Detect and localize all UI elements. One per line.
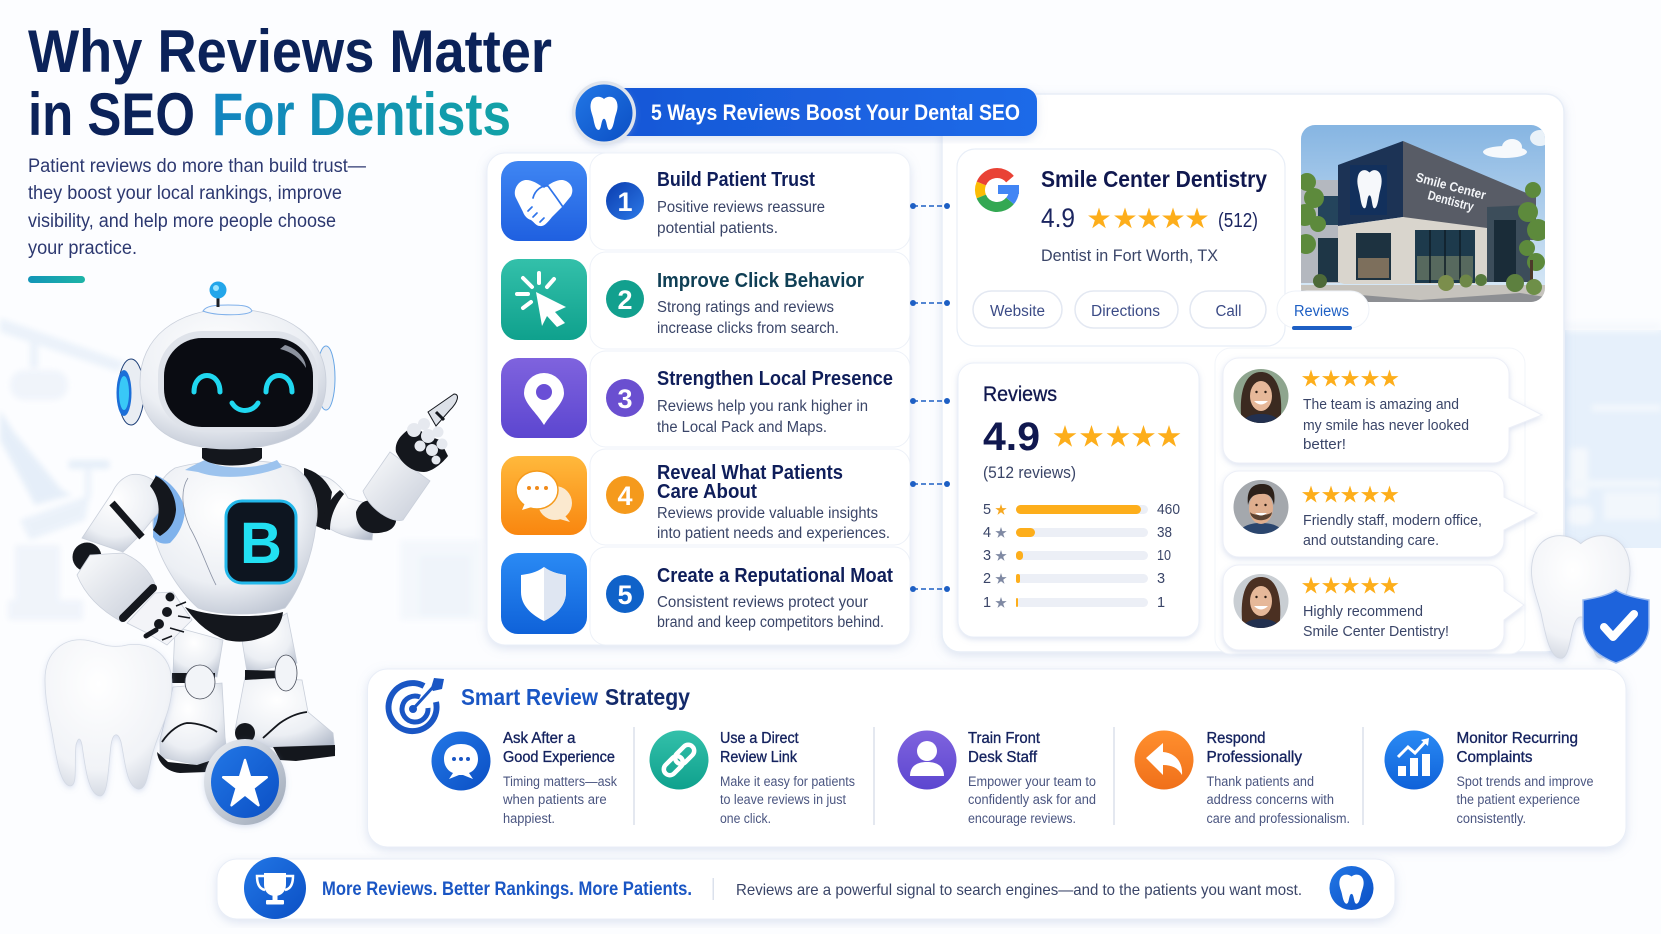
building photo: Smile Center — [1414, 169, 1488, 203]
icon: large tooth — [45, 640, 172, 796]
item: respond professionally — [1134, 730, 1350, 826]
title: Why Reviews Matter — [28, 18, 552, 85]
row 2: improve click behavior: Strong ratings and reviews — [657, 299, 834, 316]
robot: legs — [157, 613, 335, 773]
item: train front desk staff: Desk Staff — [968, 749, 1038, 766]
rating histogram: 1 — [983, 595, 991, 611]
robot: pointing arm — [304, 394, 457, 540]
row 3: strengthen local presence: Reviews help you rank higher in — [657, 398, 868, 415]
item: monitor recurring complaints: consistently. — [1456, 811, 1526, 826]
robot: head — [116, 305, 335, 449]
panel: smart review strategy: Strategy — [605, 684, 690, 710]
row 3: strengthen local presence: Strengthen Local Presence — [657, 368, 893, 390]
google business card: 4.9 — [1041, 203, 1075, 233]
intro paragraph: they boost your local rankings, improve — [28, 183, 342, 204]
rating histogram: 460 — [1157, 502, 1180, 518]
banner: 5 ways: 5 Ways Reviews Boost Your Dental SEO — [651, 100, 1020, 125]
accent bar — [28, 276, 85, 283]
avatar 3 — [1233, 573, 1289, 629]
testimonial 2 — [1223, 471, 1537, 557]
rating histogram: 3 — [1157, 571, 1165, 587]
item: ask after a good experience — [432, 730, 617, 826]
item: monitor recurring complaints: Complaints — [1456, 749, 1533, 766]
avatar 1 — [1233, 368, 1289, 424]
rating histogram: 10 — [1157, 548, 1171, 564]
icon: tooth badge — [1330, 866, 1374, 910]
icon: target — [389, 678, 444, 731]
item: respond professionally: Professionally — [1206, 749, 1302, 766]
row 1: build patient trust: potential patients. — [657, 220, 778, 237]
rating stars — [1088, 208, 1208, 228]
item: train front desk staff: confidently ask for and — [968, 792, 1096, 807]
row 1: build patient trust: 1 — [617, 187, 633, 217]
panel: reviews summary: (512 reviews) — [983, 463, 1076, 482]
building photo — [1294, 125, 1550, 302]
action buttons: Reviews — [1294, 303, 1349, 320]
rating histogram: 2 — [983, 571, 991, 587]
row 4: reveal what patients care about: Reveal What Patients — [657, 462, 843, 484]
row 4: reveal what patients care about — [501, 449, 910, 545]
robot: bent arm — [72, 474, 192, 645]
google business card — [957, 149, 1369, 346]
rating histogram: 3 — [983, 548, 991, 564]
avatar 2 — [1233, 479, 1289, 535]
google business card: Smile Center Dentistry — [1041, 166, 1267, 192]
row 1: build patient trust — [501, 153, 910, 250]
item: train front desk staff — [898, 730, 1096, 826]
stars 3 — [1302, 576, 1399, 594]
icon: tooth with shield — [1531, 536, 1649, 663]
robot: chest badge: B — [240, 511, 282, 576]
item: respond professionally: Thank patients and — [1206, 774, 1314, 789]
stars 2 — [1302, 486, 1399, 503]
action buttons: Website — [990, 303, 1045, 320]
row 3: strengthen local presence — [501, 351, 910, 447]
rating histogram: 4 — [983, 525, 991, 541]
item: train front desk staff: encourage reviews. — [968, 811, 1076, 826]
row 1: build patient trust: Positive reviews reassure — [657, 199, 825, 216]
panel: smart review strategy — [368, 669, 1626, 847]
intro paragraph: Patient reviews do more than build trust— — [28, 156, 366, 177]
panel: bottom banner — [217, 857, 1395, 919]
item: respond professionally: Respond — [1206, 730, 1266, 747]
testimonial 3: Smile Center Dentistry! — [1303, 623, 1449, 640]
item: use a direct review link: Make it easy for patients — [720, 774, 855, 789]
icon: trophy — [244, 857, 306, 919]
item: train front desk staff: Train Front — [968, 730, 1041, 747]
row 2: improve click behavior: 2 — [617, 285, 633, 315]
connectors — [910, 203, 950, 592]
summary stars — [1054, 425, 1180, 447]
row 1: build patient trust: Build Patient Trust — [657, 169, 815, 191]
item: respond professionally: care and professionalism. — [1206, 811, 1350, 826]
google business card: Dentist in Fort Worth, TX — [1041, 247, 1218, 265]
testimonial 1: The team is amazing and — [1303, 396, 1459, 413]
panel: reviews summary — [958, 363, 1199, 637]
row 4: reveal what patients care about: into patient needs and experiences. — [657, 525, 890, 542]
google business card: (512) — [1218, 210, 1258, 232]
item: use a direct review link: one click. — [720, 811, 771, 826]
action buttons — [973, 291, 1369, 330]
testimonial 3 — [1223, 565, 1524, 650]
robot: antenna — [210, 282, 226, 307]
row 5: create a reputational moat: Consistent reviews protect your — [657, 594, 868, 611]
panel: reviews summary: Reviews — [983, 383, 1057, 406]
row 5: create a reputational moat: Create a Reputational Moat — [657, 565, 893, 587]
testimonial 1: better! — [1303, 436, 1346, 453]
title: in SEO — [28, 81, 195, 148]
row 2: improve click behavior: increase clicks from search. — [657, 320, 839, 337]
building photo: Dentistry — [1426, 187, 1476, 214]
row 4: reveal what patients care about: Reviews provide valuable insights — [657, 505, 878, 522]
row 3: strengthen local presence: 3 — [617, 384, 633, 414]
stars 1 — [1302, 370, 1399, 387]
intro paragraph: visibility, and help more people choose — [28, 211, 336, 232]
robot: torso — [153, 460, 316, 614]
item: monitor recurring complaints: Monitor Recurring — [1456, 730, 1578, 747]
item: use a direct review link: Review Link — [720, 749, 797, 766]
testimonial 3: Highly recommend — [1303, 603, 1423, 620]
testimonial 1: my smile has never looked — [1303, 417, 1469, 434]
icon: google g — [980, 173, 1019, 207]
action buttons: Call — [1216, 303, 1242, 320]
row 2: improve click behavior: Improve Click Behavior — [657, 270, 864, 292]
panel: testimonial backing — [1215, 348, 1525, 654]
title: For Dentists — [212, 81, 511, 148]
item: ask after a good experience: Timing matters—ask — [503, 774, 617, 789]
item: ask after a good experience: Good Experience — [503, 749, 615, 766]
item: ask after a good experience: happiest. — [503, 811, 555, 826]
item: use a direct review link — [650, 730, 855, 826]
item: monitor recurring complaints — [1384, 730, 1594, 826]
panel: reviews summary: 4.9 — [983, 415, 1040, 459]
intro paragraph — [28, 156, 366, 259]
item: respond professionally: address concerns with — [1206, 792, 1334, 807]
item: monitor recurring complaints: Spot trends and improve — [1456, 774, 1594, 789]
item: use a direct review link: to leave reviews in just — [720, 792, 846, 807]
title — [28, 18, 552, 148]
testimonial 2: and outstanding care. — [1303, 532, 1439, 549]
row 4: reveal what patients care about: Care About — [657, 481, 757, 503]
item: ask after a good experience: when patients are — [502, 792, 607, 807]
intro paragraph: your practice. — [28, 238, 137, 259]
robot mascot — [72, 282, 457, 773]
testimonial 2: Friendly staff, modern office, — [1303, 512, 1482, 529]
action buttons: Directions — [1091, 303, 1160, 320]
icon: star coin — [204, 739, 286, 825]
testimonial 1 — [1223, 358, 1542, 463]
banner: 5 ways — [572, 81, 1037, 145]
panel: bottom banner: More Reviews. Better Rankings. More Patients. — [322, 879, 692, 900]
item: train front desk staff: Empower your team to — [968, 774, 1096, 789]
item: monitor recurring complaints: the patient experience — [1456, 792, 1580, 807]
panel: five ways list — [487, 153, 910, 645]
item: ask after a good experience: Ask After a — [503, 730, 576, 747]
row 2: improve click behavior — [501, 252, 910, 349]
row 5: create a reputational moat: brand and keep competitors behind. — [657, 614, 884, 631]
item: use a direct review link: Use a Direct — [720, 730, 799, 747]
panel: smart review strategy: Smart Review — [461, 684, 598, 710]
rating histogram: 1 — [1157, 595, 1165, 611]
row 3: strengthen local presence: the Local Pack and Maps. — [657, 419, 827, 436]
panel: bottom banner: Reviews are a powerful signal to search engines—and to the patients you want most. — [736, 882, 1302, 899]
rating histogram — [983, 502, 1180, 611]
robot: neck — [202, 448, 262, 466]
row 5: create a reputational moat: 5 — [617, 580, 633, 610]
panel: right google panel — [942, 94, 1564, 652]
rating histogram: 5 — [983, 502, 991, 518]
robot: chest badge — [226, 501, 296, 583]
row 5: create a reputational moat — [501, 547, 910, 645]
robot: pelvis — [185, 607, 283, 642]
row 4: reveal what patients care about: 4 — [617, 481, 633, 511]
rating histogram: 38 — [1157, 525, 1172, 541]
